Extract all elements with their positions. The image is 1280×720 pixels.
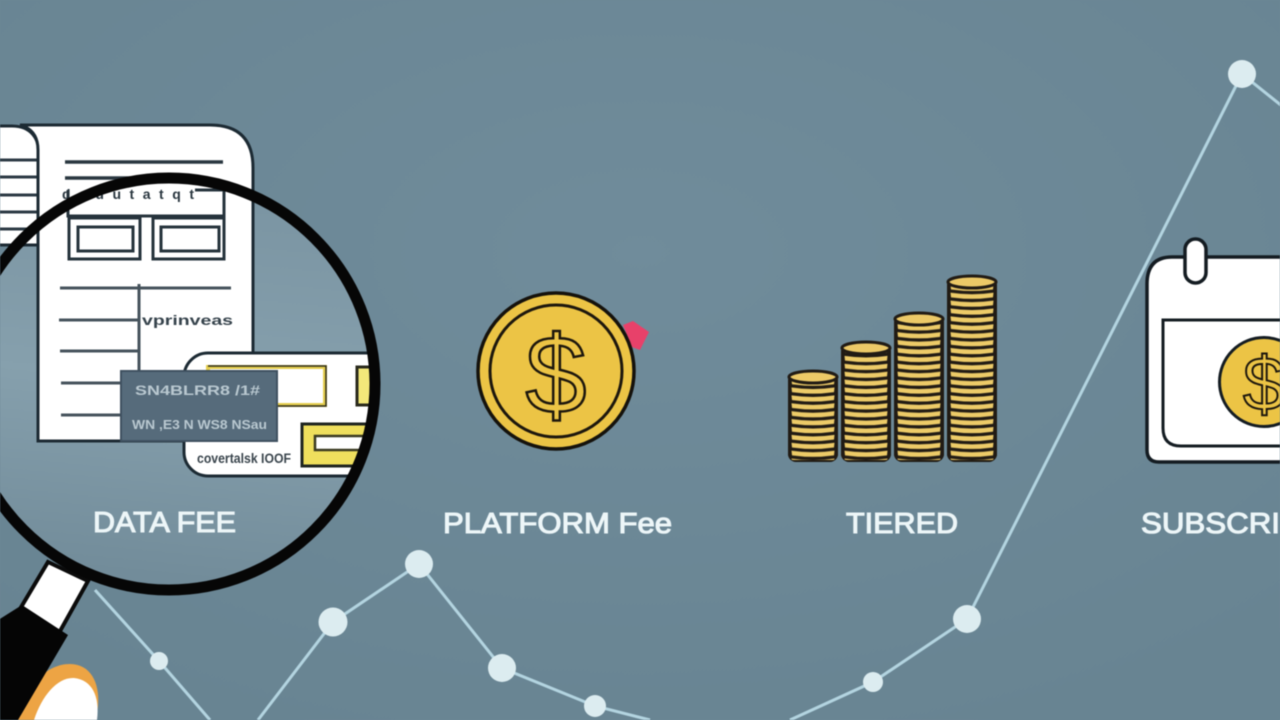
dark data tag: WN ,E3 N WS8 NSau	[132, 417, 267, 432]
label: tiered: TIERED	[846, 508, 958, 540]
document header text: dcuutatqt	[62, 186, 194, 202]
dark data tag: SN4BLRR8 /1#	[135, 382, 260, 398]
icon: tiered coin stacks	[788, 276, 997, 462]
card caption: covertalsk IOOF	[197, 450, 291, 466]
magnifier ring	[0, 178, 375, 590]
document row text: vprinveas	[142, 312, 233, 328]
stack 2	[841, 342, 891, 462]
back document	[0, 126, 40, 245]
label: subscription: SUBSCRI	[1141, 508, 1280, 540]
document field boxes	[68, 190, 224, 259]
icon: subscription calendar	[1147, 239, 1280, 462]
red marker	[623, 321, 649, 350]
handle neck	[20, 562, 88, 633]
stack 1	[788, 371, 838, 462]
fingertip	[12, 664, 98, 720]
main document	[20, 125, 253, 441]
magnifier lens	[0, 178, 375, 590]
handle grip	[0, 605, 68, 720]
label: data fee: DATA FEE	[93, 507, 236, 539]
label: platform fee: PLATFORM Fee	[443, 508, 672, 540]
overlapping card	[182, 350, 370, 478]
stack 4	[947, 276, 997, 462]
magnifier handle and hand	[0, 562, 98, 720]
calendar coin	[1220, 338, 1280, 426]
card yellow fields	[208, 366, 392, 466]
icon: platform fee coin: $	[525, 314, 587, 437]
stack 3	[894, 313, 944, 462]
icon: platform fee coin	[478, 293, 649, 449]
calendar ring	[1185, 239, 1206, 283]
dark data tag	[121, 371, 277, 441]
